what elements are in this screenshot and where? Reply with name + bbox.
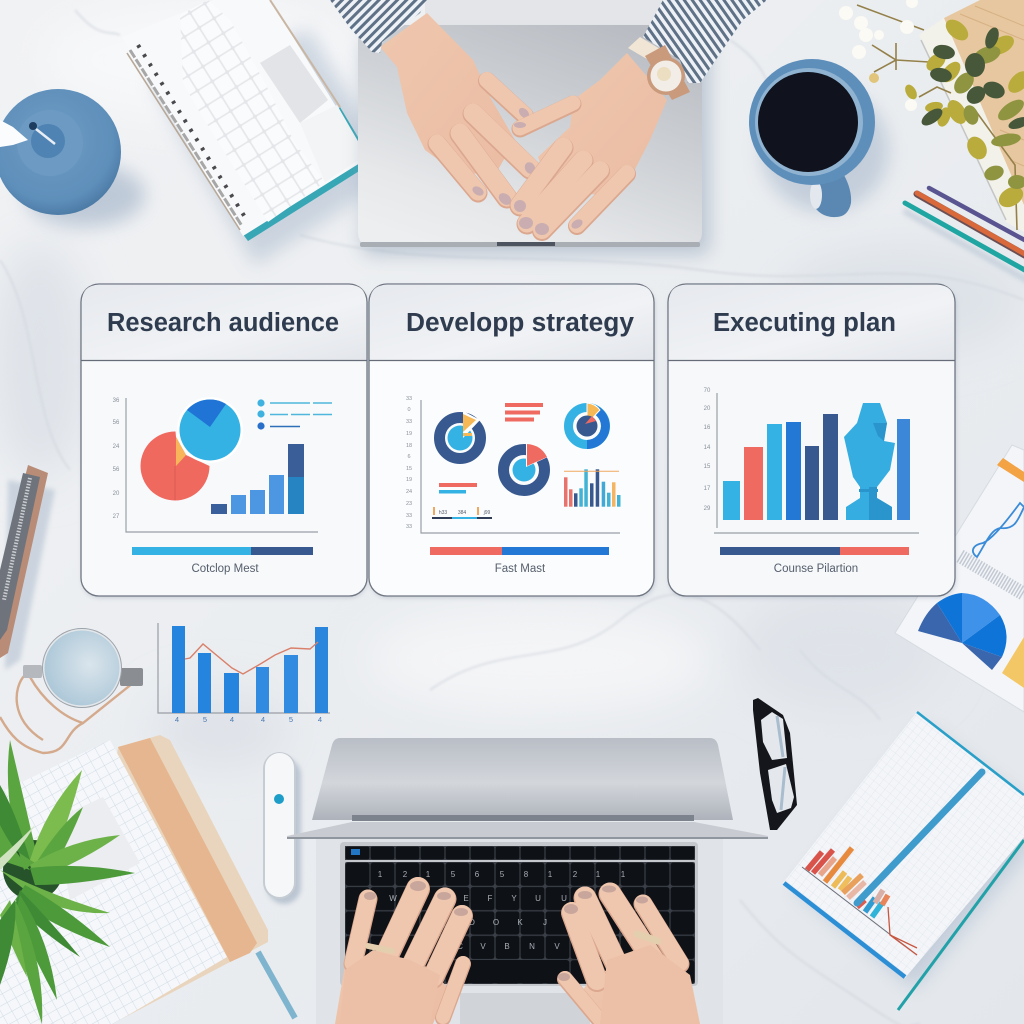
chart: donuts and bars: 19 (406, 477, 412, 483)
key labels: 1 (548, 870, 553, 879)
small bar and line chart: 5 (289, 715, 293, 724)
bottom right hand (558, 886, 700, 1024)
shirt sleeves (330, 0, 767, 83)
key labels: W (389, 894, 397, 903)
chart: donuts and bars: 384 (458, 510, 466, 516)
chart: bars and chess piece (704, 388, 919, 533)
top laptop (358, 0, 710, 255)
white box under plant (60, 797, 140, 900)
chart: bars and chess piece: 70 (704, 388, 711, 394)
key labels: N (529, 942, 535, 951)
magnifier with cord (0, 628, 143, 753)
key labels: 1 (378, 870, 383, 879)
book and wood board (919, 0, 1024, 232)
blue orb lamp (0, 89, 145, 227)
key labels: J (543, 918, 547, 927)
small bar and line chart: 4 (175, 715, 179, 724)
bottom laptop (287, 738, 768, 1024)
heading: develop strategy: Developp strategy (406, 309, 635, 337)
caption: Cotclop Mest (191, 563, 259, 575)
blue pen (857, 772, 982, 903)
caption: Fast Mast (495, 563, 546, 575)
potted plant (0, 740, 135, 1024)
eyeglasses (753, 698, 797, 830)
side paper with charts (895, 445, 1024, 712)
key labels: O (493, 918, 499, 927)
key labels: C (457, 942, 463, 951)
chart: bars and chess piece: 15 (704, 464, 711, 470)
panel: research audience (81, 284, 367, 596)
key labels: V (554, 942, 560, 951)
chart: donuts and bars (406, 396, 620, 533)
small bar and line chart: 4 (261, 715, 265, 724)
flower branch (839, 0, 1024, 230)
colored pens (905, 188, 1024, 282)
grid notebook (0, 740, 227, 1024)
chart: donuts and bars: 18 (406, 443, 412, 449)
trackpad (460, 993, 590, 1024)
mini chart (802, 848, 917, 955)
chart: pies and bars: 56 (113, 467, 120, 473)
chart: donuts and bars: 6 (407, 454, 411, 460)
chart: pies and bars: 56 (113, 420, 120, 426)
chart: pies and bars: 27 (113, 514, 120, 520)
progress bar (720, 547, 909, 555)
key labels: 8 (524, 870, 529, 879)
small bar and line chart: 4 (318, 715, 322, 724)
key labels: 5 (451, 870, 456, 879)
chart: pies and bars: 24 (113, 444, 120, 450)
chart: donuts and bars: 19 (406, 431, 412, 437)
panel: develop strategy (369, 284, 654, 596)
progress bar (430, 547, 609, 555)
chart: donuts and bars: 33 (406, 419, 412, 425)
chart: bars and chess piece: 17 (704, 486, 711, 492)
heading: executing plan: Executing plan (713, 309, 896, 337)
chart: donuts and bars: 0 (407, 407, 411, 413)
trackpad (260, 45, 328, 123)
key labels: V (480, 942, 486, 951)
chart: pies and bars: 20 (113, 491, 120, 497)
blue scribble (973, 503, 1024, 557)
top left hand (380, 13, 537, 207)
key labels: U (535, 894, 541, 903)
key labels: 5 (500, 870, 505, 879)
pie chart (918, 593, 1007, 670)
key labels: E (463, 894, 469, 903)
keyboard keys (180, 0, 325, 222)
bookmark strip (258, 952, 295, 1018)
chart: bars and chess piece: 16 (704, 425, 711, 431)
chart: donuts and bars: 23 (406, 501, 412, 507)
top right hand (514, 53, 667, 235)
key labels (378, 870, 626, 951)
key labels: B (504, 942, 510, 951)
keyboard (340, 842, 698, 986)
key labels: 1 (596, 870, 601, 879)
panel: executing plan (668, 284, 955, 596)
key labels: D (469, 918, 475, 927)
chart: donuts and bars: h33 (439, 510, 447, 516)
chart: donuts and bars: 33 (406, 524, 412, 530)
chart: donuts and bars: 15 (406, 466, 412, 472)
progress bar (132, 547, 313, 555)
heading: research audience: Research audience (107, 309, 339, 337)
small bar and line chart: 4 (230, 715, 234, 724)
teal pen (898, 840, 1024, 1010)
wooden folder (80, 735, 268, 1024)
notebook spiral (127, 53, 240, 230)
key labels: 6 (475, 870, 480, 879)
key labels: U (561, 894, 567, 903)
chart: donuts and bars: j99 (483, 510, 491, 516)
key labels: 2 (573, 870, 578, 879)
chart: donuts and bars: 24 (406, 489, 412, 495)
chart: donuts and bars: 33 (406, 513, 412, 519)
key labels: 1 (426, 870, 431, 879)
coffee mug (749, 59, 889, 217)
small bar and line chart (158, 623, 330, 724)
key labels: K (517, 918, 523, 927)
top notebook with white keyboard (126, 0, 358, 266)
card shadows (82, 287, 956, 598)
key labels: Y (511, 894, 517, 903)
chart: pies and bars: 36 (113, 398, 120, 404)
key labels: F (488, 894, 493, 903)
lower right notebook (783, 712, 1024, 990)
chart: bars and chess piece: 29 (704, 506, 711, 512)
chart: pies and bars (113, 397, 332, 532)
desk pen on the left (0, 465, 55, 670)
bottom left hand (335, 881, 468, 1024)
caption: Counse Pilartion (774, 563, 858, 575)
chart: bars and chess piece: 20 (704, 406, 711, 412)
key labels: 2 (403, 870, 408, 879)
key labels: 1 (621, 870, 626, 879)
mouse (263, 752, 301, 904)
chart: donuts and bars: 33 (406, 396, 412, 402)
wristwatch (628, 37, 690, 100)
chart: bars and chess piece: 14 (704, 445, 711, 451)
small bar and line chart: 5 (203, 715, 207, 724)
